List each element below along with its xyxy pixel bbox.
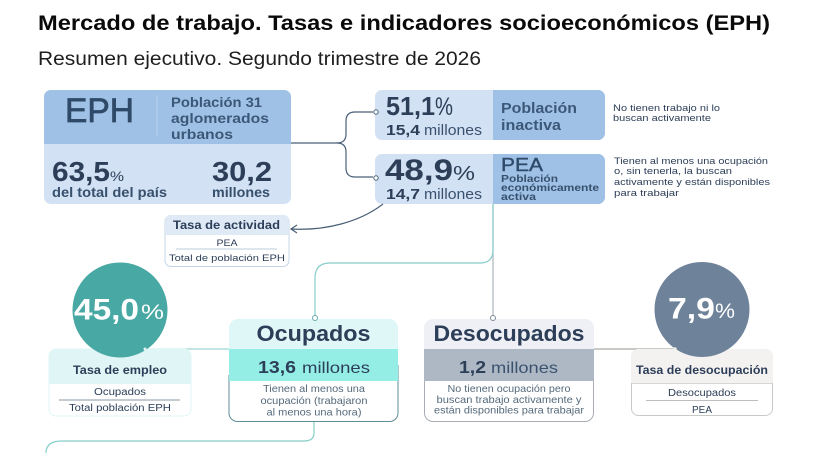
PEA description: Tienen al menos una ocupación [614,156,768,167]
circle: unemployment rate: % [715,300,735,323]
panel: EPH [44,90,291,204]
PEA figures: 14,7 [386,187,420,203]
PEA label [501,154,599,203]
panel: population inactive [374,90,605,140]
connector: Desocupados to unemployment rate [594,348,675,350]
PEA figures [385,154,482,203]
EPH acronym: EPH [65,92,134,130]
panel: activity rate [165,215,289,266]
population total: 30,2 [212,156,272,187]
panel: Desocupados: millones [491,360,558,377]
panel: Ocupados: al menos una hora) [266,406,362,418]
connector: Ocupados to employment rate [145,348,229,350]
population total [212,156,272,200]
panel: unemployment rate: Desocupados [668,388,736,399]
panel: Desocupados: 1,2 [459,357,486,377]
share of country: 63,5 [52,156,110,187]
circle: employment rate [72,262,168,358]
inactive description: No tienen trabajo ni lo [613,103,720,114]
panel: Desocupados: buscan trabajo activamente y [436,394,582,406]
PEA label: Población [501,173,558,185]
PEA figures: 48,9 [385,154,453,187]
panel: unemployment rate [631,349,773,416]
panel: Ocupados: Ocupados [256,321,370,346]
panel: Ocupados: ocupación (trabajaron [260,395,368,407]
connector: EPH to inactive and PEA [291,112,373,177]
circle: unemployment rate [654,262,750,357]
panel: Desocupados: No tienen ocupación pero [448,383,571,395]
PEA label: PEA [501,154,544,175]
panel: employment rate: Tasa de empleo [73,365,167,377]
share of country: % [110,168,124,184]
panel: Ocupados: 13,6 [258,357,296,377]
panel: Ocupados: Tienen al menos una [263,383,365,395]
panel: activity rate: PEA [216,238,238,249]
PEA label: activa [501,191,536,203]
circle: employment rate: 45,0 [74,294,139,326]
circle: employment rate: % [141,301,164,324]
PEA figures: millones [424,187,482,203]
connectors from PEA to Ocupados and Desocupados [46,204,493,453]
inactive figures: 15,4 [386,123,420,139]
panel: employment rate: Total población EPH [69,403,171,414]
inactive figures: % [435,93,453,121]
subtitle: Resumen ejecutivo. Segundo trimestre de 2026 [38,49,481,70]
EPH description: aglomerados [171,110,269,126]
inactive figures: millones [424,123,482,139]
inactive figures [386,91,482,139]
panel: employment rate: Ocupados [94,387,146,398]
inactive description: buscan activamente [613,113,711,124]
circle: unemployment rate: 7,9 [668,292,715,326]
EPH description: Población 31 [171,94,262,110]
panel: employment rate [49,349,191,416]
PEA description: activamente y están disponibles [614,177,770,188]
PEA label: económicamente [501,182,599,194]
PEA description: o, sin tenerla, la buscan [614,166,732,177]
population total: millones [212,184,270,200]
share of country [52,156,167,200]
inactive label: Población [501,100,577,117]
share of country: del total del país [52,184,167,200]
panel: Desocupados [424,316,594,422]
panel: Desocupados: están disponibles para trabajar [434,404,585,416]
panel: Ocupados: millones [302,360,370,377]
panel: activity rate: Total de población EPH [169,253,285,264]
panel: Ocupados [229,316,398,422]
panel: Desocupados: Desocupados [434,321,584,346]
panel: unemployment rate: Tasa de desocupación [636,363,768,377]
PEA description: para trabajar [614,188,679,199]
panel: activity rate: Tasa de actividad [173,220,280,232]
arrow: PEA to activity rate [291,204,383,233]
PEA figures: % [453,163,475,185]
title: Mercado de trabajo. Tasas e indicadores socioeconómicos (EPH) [38,12,770,35]
panel: PEA [374,154,605,204]
panel: unemployment rate: PEA [692,405,712,416]
inactive label: inactiva [501,117,562,134]
inactive figures: 51,1 [386,91,435,121]
EPH description: urbanos [171,126,233,142]
